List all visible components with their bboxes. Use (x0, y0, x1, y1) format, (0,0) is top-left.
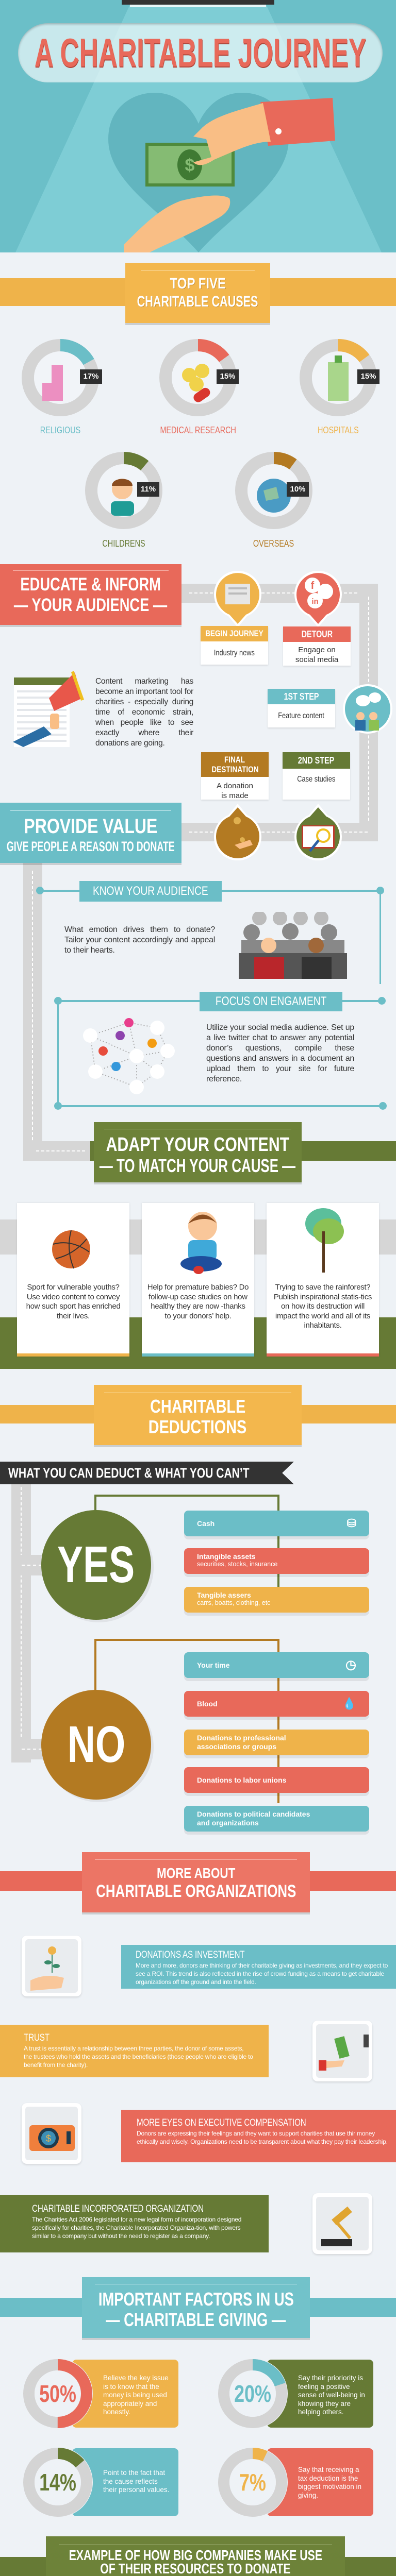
item: blood: 💧 (342, 1697, 356, 1710)
pin: industry news (214, 571, 261, 626)
factor: 20% (218, 2359, 373, 2428)
road: deductions (11, 1484, 31, 1762)
road: educate section (182, 584, 378, 603)
banner: educate & inform your audience: — YOUR AUDIENCE — (14, 595, 168, 615)
donut: hospitals 15% (300, 339, 380, 435)
label: 1st step (268, 689, 335, 727)
label: 1st step: Feature content (278, 711, 324, 720)
donut: childrens 11%: 11% (141, 485, 156, 494)
circle: YES: YES (57, 1536, 135, 1594)
donut: overseas 10%: OVERSEAS (253, 538, 294, 549)
icon: handing money (312, 2021, 372, 2081)
label: begin journey (201, 626, 268, 665)
factor: 14%: 14% (39, 2469, 76, 2496)
org: executive compensation: Donors are expressing their feelings and they want to support charities that use thir money ethically and wisely. Organizations need to be transparent about what they pay their leadership. (137, 2130, 388, 2145)
item: intangible: Intangible assets (197, 1552, 256, 1561)
illustration: heart with hands and bill (108, 93, 335, 252)
icon: gavel (312, 2193, 372, 2254)
factor: 50%: Believe the key issue is to know that the money is being used appropriately and honestly. (103, 2374, 169, 2416)
text: MORE ABOUT (157, 1865, 235, 1881)
donut: religious 17% (22, 339, 102, 435)
item: tangible (184, 1587, 369, 1613)
label: final destination: FINAL (224, 755, 245, 765)
label: final destination: A donation (217, 782, 253, 790)
title pill: A CHARITABLE JOURNEY (35, 30, 366, 75)
factor: 50%: 50% (39, 2381, 76, 2407)
icon: megaphone (13, 671, 84, 747)
pin: social media: in (311, 597, 319, 606)
panel: know your audience (36, 881, 384, 984)
ribbon: what you can deduct: WHAT YOU CAN DEDUCT & WHAT YOU CAN’T (8, 1465, 250, 1481)
label: 2nd step: Case studies (297, 775, 335, 784)
text: IMPORTANT FACTORS IN US (98, 2289, 294, 2310)
donut: childrens 11%: CHILDRENS (102, 538, 145, 549)
org: trust (0, 2025, 269, 2077)
spotlight lamp (122, 0, 274, 5)
text: — CHARITABLE GIVING — (106, 2309, 286, 2330)
text: CHARITABLE (150, 1396, 245, 1417)
text: CHARITABLE CAUSES (137, 293, 258, 310)
header: teal hero (0, 0, 396, 252)
banner: adapt your content (94, 1122, 302, 1182)
org: donations as investment: DONATIONS AS INVESTMENT (136, 1950, 244, 1960)
text: TOP FIVE (170, 275, 226, 292)
org: charitable incorporated organization (0, 2195, 269, 2252)
org: trust: A trust is essentially a relationship between three parties, the donor of some assets, the trustees who hold the assets and the beneficiaries (those people who are eligible to benefit from the charity). (24, 2045, 253, 2069)
tag: focus on engagement: FOCUS ON ENGAMENT (216, 994, 326, 1008)
card: babies: Help for premature babies? Do follow-up case studies on how healthy they are now -thanks to your donors’ help. (147, 1283, 249, 1320)
banner: provide value: PROVIDE VALUE (24, 815, 158, 838)
item: political: Donations to political candidates (197, 1810, 310, 1818)
pin: case studies (294, 804, 342, 860)
factor: 14%: Point to the fact that the cause reflects their personal values. (103, 2469, 169, 2494)
label: detour: DETOUR (301, 629, 333, 639)
label: final destination: DESTINATION (211, 765, 258, 774)
tag: know your audience (79, 881, 222, 902)
item: your time: ◷ (345, 1658, 356, 1672)
card: rainforest (267, 1203, 379, 1357)
label: begin journey: Industry news (214, 649, 255, 657)
banner: charitable deductions (0, 1405, 396, 1423)
factor: 7%: 7% (239, 2469, 266, 2496)
donut: overseas 10%: 10% (290, 485, 306, 494)
item: cash (184, 1511, 369, 1536)
item: political: and organizations (197, 1819, 259, 1827)
connectors (94, 1495, 279, 1803)
donut: medical research 15%: 15% (220, 372, 236, 381)
text: twitter chat: Utilize your social media audience. Set up a live twitter chat to answer any potential donor’s questions, compile these questions and answers in a document an upload them to your site for future reference. (206, 1023, 354, 1083)
org: charitable incorporated organization: CHARITABLE INCORPORATED ORGANIZATION (32, 2204, 204, 2214)
pin: social media: f (311, 580, 315, 591)
icon: camera (22, 2103, 81, 2164)
item: tangible: carrs, boatts, clothing, etc (197, 1599, 270, 1606)
donut: religious 17%: RELIGIOUS (40, 425, 80, 435)
label: detour: Engage on (298, 646, 336, 654)
banner: important factors (0, 2298, 396, 2317)
tag: know your audience: KNOW YOUR AUDIENCE (93, 884, 208, 898)
icon: camera: $ (46, 2133, 51, 2144)
label: 2nd step: 2ND STEP (298, 755, 335, 766)
icon: people talking (343, 684, 392, 734)
banner: adapt your content: ADAPT YOUR CONTENT (106, 1134, 289, 1156)
panel: focus on engagement (54, 992, 387, 1110)
org: charitable incorporated organization: The Charities Act 2006 legislated for a new legal form of incorporation designed specifically for charities, the Charitable Incorporated Organiza-tion, with powers similar to a company but without the need to register as a company. (32, 2216, 241, 2240)
banner: educate & inform your audience: EDUCATE & INFORM (21, 574, 161, 595)
card: babies (142, 1203, 254, 1357)
card: sport (17, 1203, 129, 1357)
card: sport: Sport for vulnerable youths? Use video content to convey how such sport has enriched their lives. (26, 1283, 120, 1320)
pin: social media (294, 571, 342, 626)
factor: 14% (23, 2448, 178, 2517)
item: cash: ⛁ (347, 1517, 356, 1530)
item: tangible: Tangible assers (197, 1591, 251, 1599)
item: professional: Donations to professional (197, 1734, 286, 1742)
text: content marketing: Content marketing has become an important tool for charities - especially during time of economic strain, when people like to see exactly where their donations are going. (95, 677, 193, 748)
org: donations as investment: More and more, donors are thinking of their charitable giving as investments, and they expect to see a ROI. This trend is also reflected in the rise of crowd funding as a means to get charitable organizations off the ground and into the field. (136, 1962, 388, 1986)
donut: religious 17%: 17% (83, 372, 99, 381)
org: executive compensation: MORE EYES ON EXECUTIVE COMPENSATION (137, 2117, 306, 2128)
banner: example of big companies (0, 2557, 396, 2576)
label: begin journey: BEGIN JOURNEY (205, 629, 263, 638)
donut: overseas 10% (235, 452, 312, 549)
item: your time (184, 1652, 369, 1678)
item: political (184, 1806, 369, 1832)
card: rainforest: Trying to save the rainforest? Publish inspirational statis-tics on how its destruction will impact the world and all of its inhabitants. (274, 1283, 372, 1330)
item: intangible: securities, stocks, insurance (197, 1561, 277, 1568)
text: EXAMPLE OF HOW BIG COMPANIES MAKE USE (69, 2547, 322, 2563)
item: professional (184, 1730, 369, 1755)
icon: plant money (22, 1936, 81, 1996)
tag: focus on engagement (200, 992, 342, 1011)
text: emotion: What emotion drives them to donate? Tailor your content accordingly and appeal to their hearts. (64, 925, 215, 955)
item: intangible (184, 1548, 369, 1574)
icon: social network (83, 1018, 175, 1094)
org: donations as investment (121, 1945, 396, 1989)
circle: NO: NO (67, 1716, 125, 1773)
circle: YES (41, 1510, 151, 1620)
text: DEDUCTIONS (148, 1416, 247, 1437)
item: labor unions: Donations to labor unions (197, 1776, 286, 1784)
pin: donation (214, 804, 261, 860)
item: your time: Your time (197, 1661, 230, 1669)
label: 1st step: 1ST STEP (284, 691, 319, 702)
label: detour: social media (295, 655, 338, 664)
icon: crowd (239, 912, 347, 979)
item: blood (184, 1691, 369, 1717)
banner: top five charitable causes (0, 278, 396, 306)
donut: medical research 15%: MEDICAL RESEARCH (160, 425, 236, 435)
label: 2nd step (283, 752, 350, 800)
donut: childrens 11% (85, 452, 162, 549)
illustration: heart with hands and bill: $ (185, 156, 195, 175)
item: professional: associations or groups (197, 1742, 276, 1751)
ribbon: what you can deduct (0, 1462, 294, 1484)
banner: educate & inform your audience (0, 564, 182, 625)
donut: hospitals 15%: HOSPITALS (318, 425, 359, 435)
banner: adapt your content: — TO MATCH YOUR CAUSE — (100, 1155, 296, 1176)
banner: provide value: GIVE PEOPLE A REASON TO DONATE (7, 839, 175, 854)
strip: adapt green (90, 1141, 396, 1161)
item: blood: Blood (197, 1700, 218, 1708)
org: trust: TRUST (24, 2032, 50, 2043)
band: cards background (0, 1219, 396, 1255)
donut: hospitals 15%: 15% (360, 372, 376, 381)
donut: medical research 15% (159, 339, 239, 435)
title pill (18, 23, 383, 82)
factor: 50% (23, 2359, 178, 2428)
factor: 7% (218, 2448, 373, 2517)
banner: more about charitable organizations (0, 1871, 396, 1891)
text: CHARITABLE ORGANIZATIONS (96, 1882, 296, 1901)
factor: 20%: Say their prioriority is feeling a positive sense of well-being in khowing they are helping others. (298, 2374, 365, 2416)
item: labor unions (184, 1767, 369, 1793)
item: cash: Cash (197, 1519, 214, 1528)
factor: 20%: 20% (234, 2381, 271, 2407)
banner: provide value (0, 803, 182, 863)
factor: 7%: Say that receiving a tax deduction is the biggest motivation in giving. (298, 2466, 361, 2499)
label: detour (283, 626, 351, 666)
org: executive compensation (121, 2110, 396, 2162)
circle: NO (41, 1690, 151, 1800)
label: final destination (201, 752, 269, 800)
